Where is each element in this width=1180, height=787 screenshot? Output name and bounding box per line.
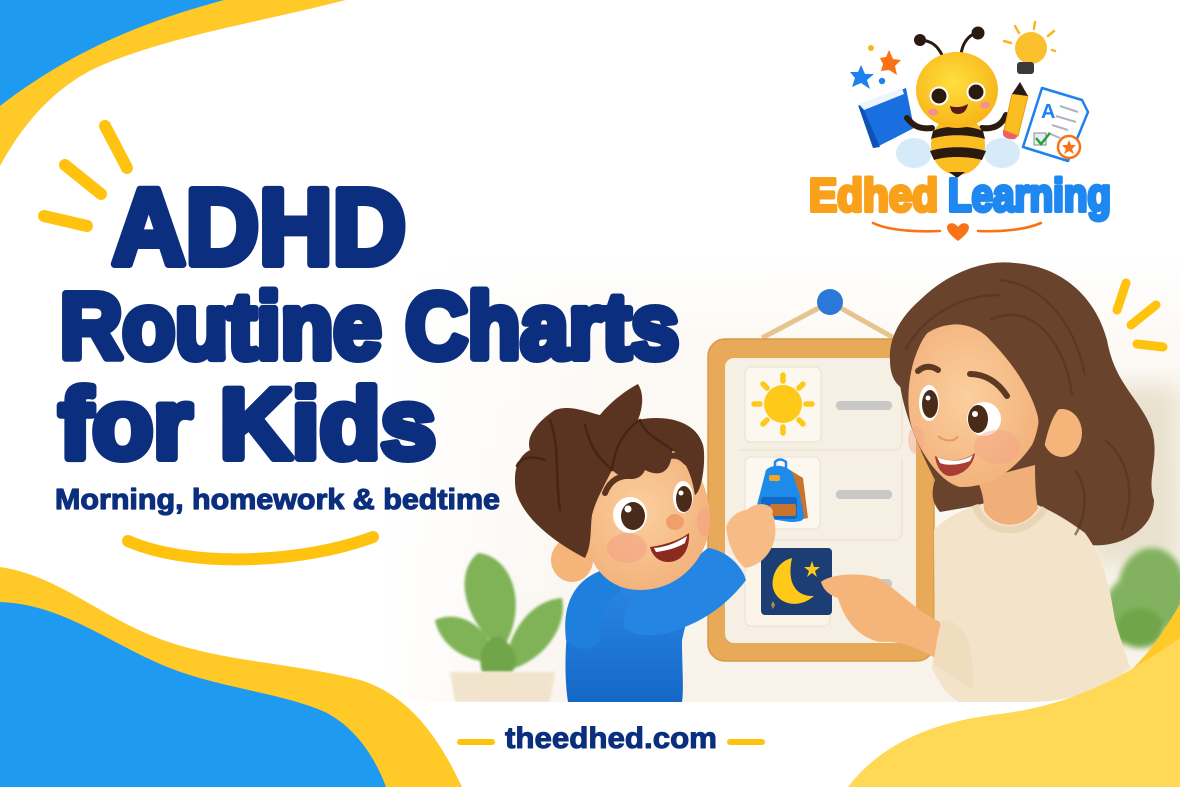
logo wordmark: Learning [948,169,1111,221]
boy hoodie [565,548,746,702]
boy nose, cheek, mouth [607,508,711,563]
logo: Edhed Learning [809,22,1111,241]
mother ear [1042,409,1082,457]
website footer [457,722,765,755]
boy arm hand [726,504,775,568]
left plant [435,553,563,702]
logo underline with heart [873,223,1041,241]
board frame [708,339,934,661]
boy hood [565,570,622,649]
logo wordmark: Edhed [809,169,938,221]
icon: graded paper: A [1041,101,1055,123]
mother neck [977,465,1038,525]
mother sweater [932,503,1130,702]
corner wave: bottom left [0,567,462,787]
icon: pencil [1003,82,1028,139]
mother eyes and brows [918,367,1007,436]
icon: stars [850,45,901,89]
boy hair [515,384,704,558]
title: ADHD [112,166,406,287]
bottom card base [745,560,830,626]
icon: blue book [858,88,914,148]
corner wave: top left [0,0,346,166]
label bar [836,401,892,410]
title: for Kids [59,368,436,479]
right plant [1105,548,1180,648]
mother arm and hand pointing [821,575,973,690]
mother hair strands [905,280,1129,535]
card: backpack [745,457,820,529]
card: sun [745,367,821,442]
subtitle: Morning, homework & bedtime [55,484,500,516]
title: Routine Charts [60,274,679,378]
label bar [860,579,892,588]
decorative sparks: right [1117,283,1163,347]
decorative sparks: title [44,126,127,226]
mother hair front [890,269,1102,460]
hanging rope and pin [762,289,894,338]
logo wordmark [809,169,1111,221]
corner wave: bottom right [848,604,1180,787]
boy head [584,447,710,590]
subtitle underline swoosh [128,537,373,559]
board inner panel [725,358,916,643]
label bar [836,490,892,499]
card: moon [761,548,832,615]
mother hair back [892,262,1155,545]
white floor and curve [405,640,1180,787]
website footer: theedhed.com [505,722,717,755]
boy sleeve [624,548,746,635]
icon: graded paper [1023,88,1088,161]
mother collar [975,505,1045,530]
wall background [380,250,1180,702]
boy [515,384,775,702]
title [59,166,679,479]
icon: light bulb [1004,22,1055,74]
mother face [908,324,1039,487]
icon: bee mascot [896,26,1020,178]
mother cheek, nose, mouth [908,426,1020,476]
boy eyes and brows [605,456,693,533]
mother [821,262,1155,702]
boy ear [551,538,593,582]
mother sleeve cuff [934,620,973,690]
routine chart board [708,289,934,661]
